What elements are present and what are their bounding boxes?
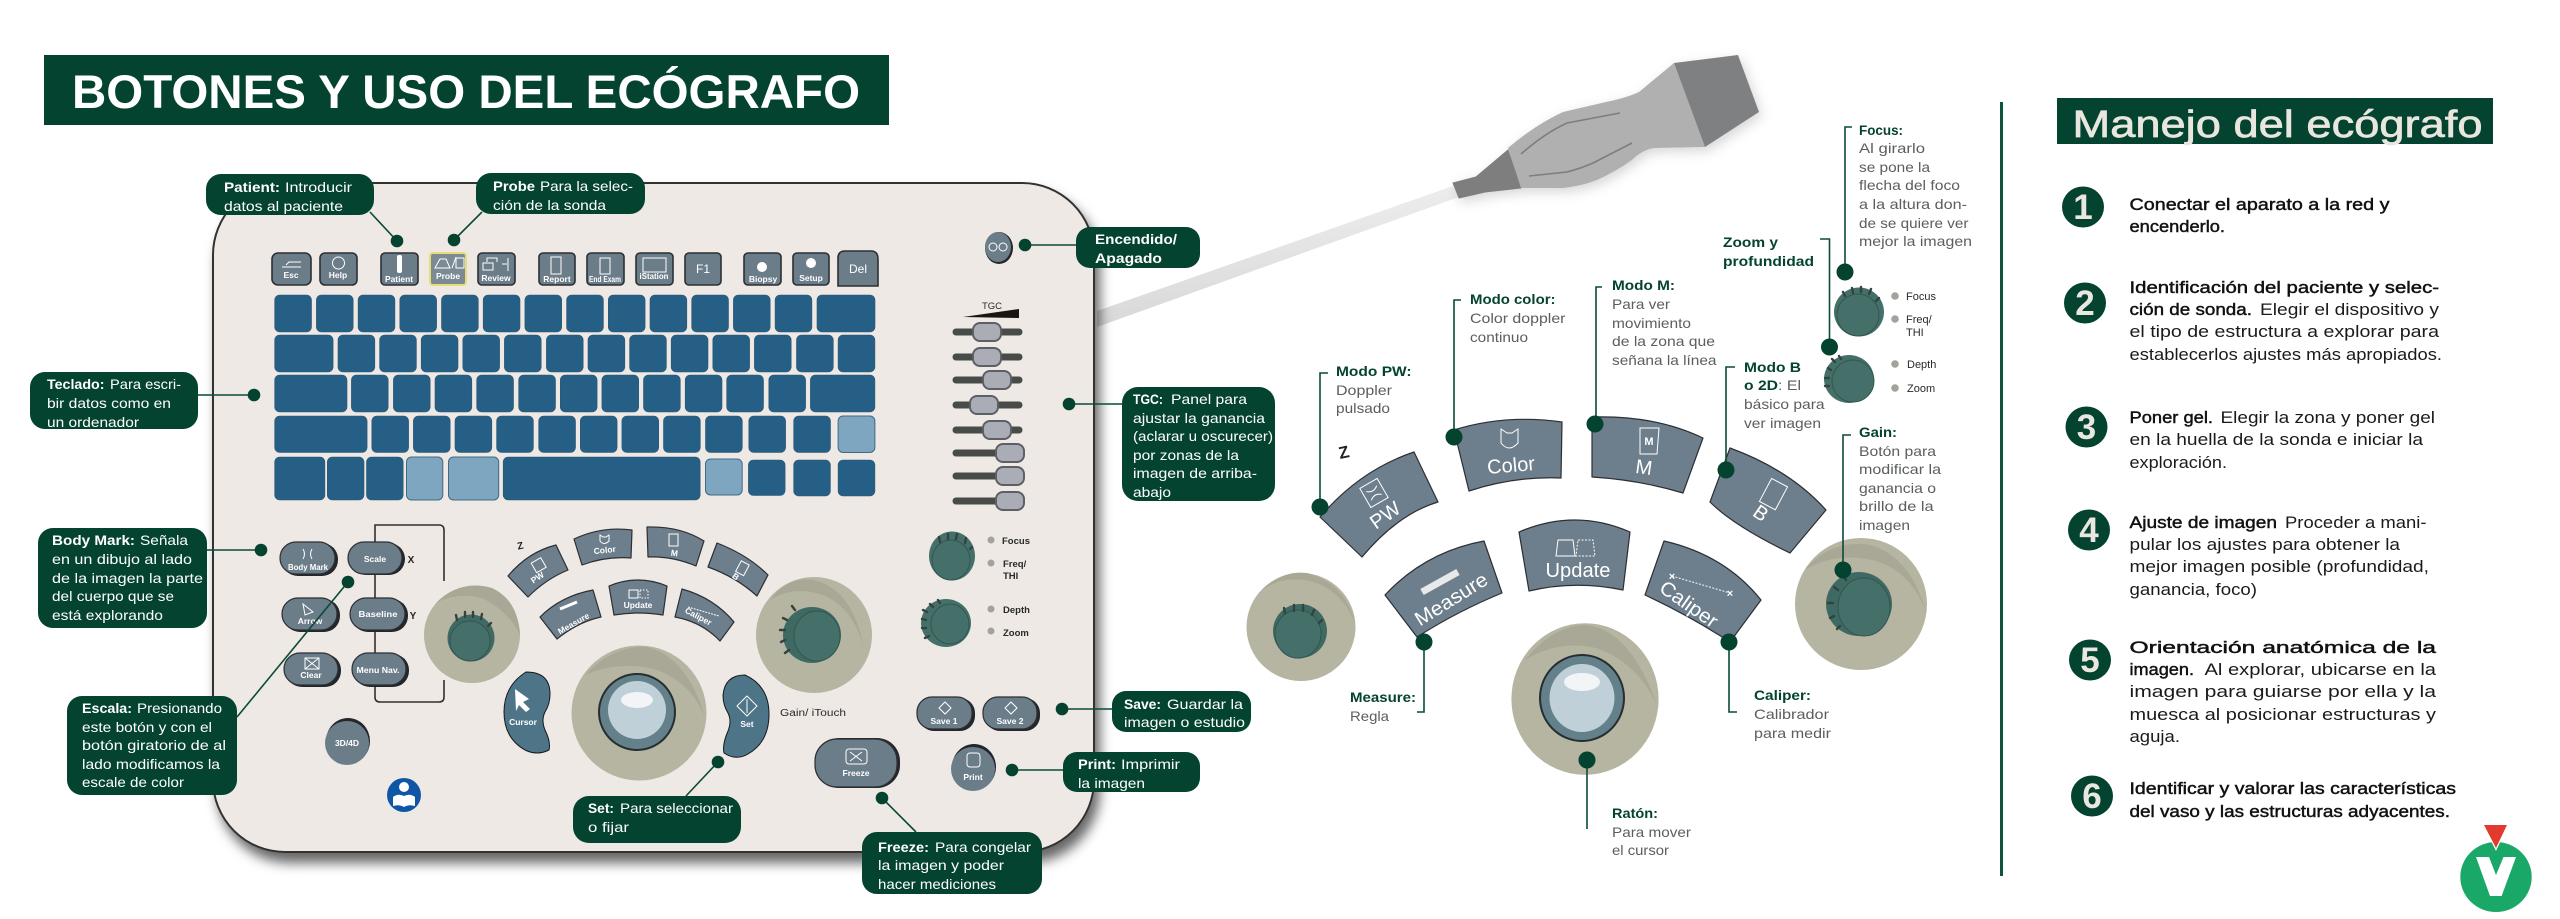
top function buttons: Help <box>329 270 347 280</box>
left keys and scale bracket: Scale <box>364 554 386 564</box>
enlarged soft keys: Update <box>1546 560 1610 582</box>
enlarged focus and depth knobs: THI <box>1906 327 1924 339</box>
cursor and set keys: Set <box>740 719 754 729</box>
soft keys small: B <box>730 571 741 582</box>
callout: Freeze: hacer mediciones <box>878 876 996 892</box>
annotation: Modo PW <box>1312 363 1412 516</box>
cursor and set keys: Cursor <box>509 717 538 727</box>
top function buttons: Probe <box>436 271 460 281</box>
annotation: Modo M <box>1586 277 1717 432</box>
callout: Encendido: Apagado <box>1095 250 1162 266</box>
step 6: 6 <box>2082 777 2102 816</box>
callout: Save: imagen o estudio <box>1124 714 1245 730</box>
left keys and scale bracket: Arrow <box>298 616 323 626</box>
annotation: Modo B: Modo B <box>1744 359 1801 375</box>
focus and depth knobs: Depth <box>1003 605 1030 616</box>
annotation: Modo B: básico para <box>1744 396 1825 412</box>
callout: Set <box>573 756 741 843</box>
annotation: Measure: Measure: <box>1350 689 1416 705</box>
annotation: Focus: flecha del foco <box>1859 177 1960 193</box>
step 1: Conectar el aparato a la red y <box>2130 196 2390 214</box>
step 5: muesca al posicionar estructuras y <box>2130 706 2437 724</box>
focus and depth knobs: Freq/ <box>1003 559 1027 570</box>
annotation: Focus: de se quiere ver <box>1859 215 1969 231</box>
callout: Freeze <box>862 792 1042 894</box>
callout: Body Mark: Señala <box>140 532 188 548</box>
annotation: Modo color: Color doppler <box>1470 310 1566 326</box>
step 3: Elegir la zona y poner gel <box>2220 409 2435 427</box>
annotation: Caliper: para medir <box>1754 725 1831 741</box>
annotation: Gain: ganancia o <box>1859 480 1936 496</box>
annotation: Modo M: señana la línea <box>1612 352 1717 368</box>
callout: Probe <box>448 173 645 246</box>
enlarged dial right <box>1795 538 1927 670</box>
callout: Patient <box>206 174 403 247</box>
focus and depth knobs: THI <box>1003 571 1018 582</box>
callout: Save <box>1056 691 1251 732</box>
callout: TGC: (aclarar u oscurecer) <box>1133 428 1273 444</box>
step 2: el tipo de estructura a explorar para <box>2130 323 2440 341</box>
callout: TGC: Panel para <box>1171 391 1247 407</box>
callout: Teclado: Teclado: <box>47 376 104 392</box>
annotation: Modo color: Modo color: <box>1470 291 1556 307</box>
enlarged soft keys: M <box>1634 456 1654 480</box>
icon: ultrasound probe <box>1097 55 1759 327</box>
enlarged focus and depth knobs: Freq/ <box>1906 314 1933 326</box>
enlarged trackball <box>1511 623 1659 775</box>
enlarged soft keys: Measure <box>1411 569 1492 631</box>
annotation: Zoom y profundidad: Zoom y <box>1723 234 1778 250</box>
callout: Escala: botón giratorio de al <box>82 737 226 753</box>
trackball <box>572 646 706 780</box>
soft keys small: PW <box>529 569 547 585</box>
callout: Print: Imprimir <box>1121 756 1180 772</box>
callout: Encendido: Encendido/ <box>1095 231 1177 247</box>
annotation: Focus: se pone la <box>1859 159 1930 175</box>
soft keys small: Color <box>593 544 617 556</box>
left keys and scale bracket: Menu Nav. <box>356 665 400 675</box>
callout: Patient: Patient: <box>224 179 280 195</box>
save freeze print keys: Save 1 <box>931 716 958 726</box>
step 1 <box>2062 186 2390 236</box>
step 5: Al explorar, ubicarse en la <box>2204 661 2437 679</box>
step 5: imagen para guiarse por ella y la <box>2130 683 2437 701</box>
annotation: Modo B: : El <box>1778 377 1801 393</box>
annotation: Gain: Gain: <box>1859 424 1897 440</box>
top function buttons: Biopsy <box>749 274 777 284</box>
annotation: Gain: brillo de la <box>1859 498 1934 514</box>
callout: Freeze: la imagen y poder <box>878 857 1004 873</box>
top function buttons: Esc <box>283 270 299 280</box>
focus and depth knobs: Focus <box>1002 536 1030 547</box>
power button <box>985 232 1013 264</box>
callout: TGC: imagen de arriba- <box>1133 465 1257 481</box>
TGC sliders <box>956 301 1024 510</box>
TGC sliders: TGC <box>982 301 1002 312</box>
annotation: Modo color: continuo <box>1470 329 1528 345</box>
enlarged soft keys: PW <box>1366 497 1405 534</box>
annotation: Modo B <box>1718 359 1825 478</box>
enlarged focus and depth knobs <box>1824 287 1936 403</box>
top function buttons: iStation <box>640 271 668 281</box>
logo <box>2460 823 2532 912</box>
step 5: imagen. <box>2130 661 2194 679</box>
callout: Escala: Presionando <box>137 700 222 716</box>
enlarged soft keys <box>1320 417 1826 642</box>
callout: Print: Print: <box>1078 756 1116 772</box>
annotation: Gain: Botón para <box>1859 443 1936 459</box>
title <box>44 55 889 125</box>
callout: Escala: este botón y con el <box>82 719 212 735</box>
save freeze print keys: Freeze <box>843 768 870 778</box>
callout: Probe: Probe <box>493 178 535 194</box>
annotation: Measure: Regla <box>1350 708 1389 724</box>
callout: TGC: abajo <box>1133 484 1171 500</box>
annotation: Focus: a la altura don- <box>1859 196 1967 212</box>
annotation: Zoom y profundidad: profundidad <box>1723 253 1814 269</box>
callout: Freeze: Para congelar <box>935 839 1031 855</box>
top function buttons: Setup <box>799 273 823 283</box>
callout: Save: Guardar la <box>1167 696 1243 712</box>
step 5: aguja. <box>2130 728 2180 746</box>
callout: Escala: Escala: <box>82 700 132 716</box>
annotation: Gain <box>1834 424 1941 578</box>
focus and depth knobs <box>921 532 1030 647</box>
annotation: Modo PW: Modo PW: <box>1336 363 1412 379</box>
step 2: 2 <box>2075 284 2095 323</box>
annotation: Modo PW: Z <box>1337 442 1351 463</box>
annotation: Ratón: Para mover <box>1612 824 1691 840</box>
annotation: Modo B: o 2D <box>1744 377 1778 393</box>
step 5: 5 <box>2080 641 2100 680</box>
enlarged focus and depth knobs: Zoom <box>1907 383 1935 395</box>
enlarged focus and depth knobs: Depth <box>1907 359 1936 371</box>
top function buttons: F1 <box>696 262 710 276</box>
annotation: Modo M: de la zona que <box>1612 333 1715 349</box>
callout: Teclado <box>30 372 260 430</box>
step 4: ganancia, foco) <box>2130 581 2257 599</box>
step 2: establecerlos ajustes más apropiados. <box>2130 346 2442 364</box>
panel: ultrasound console <box>213 183 1094 852</box>
step 3: exploración. <box>2130 454 2227 472</box>
step 3: en la huella de la sonda e iniciar la <box>2130 431 2424 449</box>
annotation: Ratón: Ratón: <box>1612 805 1658 821</box>
keyboard <box>275 295 875 500</box>
enlarged soft keys: Color <box>1486 453 1536 479</box>
annotation: Modo B: ver imagen <box>1744 415 1821 431</box>
callout: Body Mark: en un dibujo al lado <box>52 551 192 567</box>
cursor and set keys <box>504 672 769 757</box>
focus and depth knobs: Zoom <box>1003 628 1029 639</box>
panel: enlarged controls <box>1246 287 1936 775</box>
callout: Encendido <box>1019 227 1200 268</box>
step 1: encenderlo. <box>2130 218 2225 236</box>
callout: Escala: lado modificamos la <box>82 756 220 772</box>
soft keys small: Update <box>624 600 653 610</box>
left keys and scale bracket: 3D/4D <box>335 738 359 748</box>
annotation: Caliper: Caliper: <box>1754 687 1811 703</box>
enlarged soft keys: × <box>1669 571 1675 583</box>
step 1: 1 <box>2073 188 2093 227</box>
heading: Manejo del ecógrafo <box>2057 98 2493 146</box>
callout: Patient: Introducir <box>285 179 352 195</box>
annotation: Caliper: Calibrador <box>1754 706 1829 722</box>
step 5: Orientación anatómica de la <box>2130 639 2437 657</box>
annotation: Focus: mejor la imagen <box>1859 233 1972 249</box>
icon: user manual <box>387 778 421 812</box>
annotation: Ratón <box>1578 752 1691 858</box>
step 6: del vaso y las estructuras adyacentes. <box>2130 803 2450 821</box>
callout: TGC: TGC: <box>1133 391 1163 407</box>
step 6: Identificar y valorar las características <box>2130 780 2456 798</box>
callout: Set: Para seleccionar <box>620 800 733 816</box>
callout: TGC <box>1063 387 1275 501</box>
annotation: Caliper <box>1720 634 1831 741</box>
callout: Teclado: un ordenador <box>47 414 139 430</box>
callout: Probe: Para la selec- <box>540 178 633 194</box>
annotation: Gain: modificar la <box>1859 461 1941 477</box>
annotation: Modo PW: pulsado <box>1336 400 1390 416</box>
callout: Teclado: bir datos como en <box>47 395 171 411</box>
soft keys small: Z <box>516 541 525 553</box>
step 3: Poner gel. <box>2130 409 2213 427</box>
left keys and scale bracket: Baseline <box>358 609 398 619</box>
annotation: Measure <box>1350 634 1432 724</box>
top function buttons: End Exam <box>589 274 621 284</box>
step 4: 4 <box>2079 511 2099 550</box>
annotation: Focus <box>1836 122 1972 280</box>
top function buttons <box>272 251 878 286</box>
callout: Body Mark: Body Mark: <box>52 532 135 548</box>
annotation: Zoom y profundidad <box>1723 234 1838 356</box>
enlarged focus and depth knobs: Focus <box>1906 291 1936 303</box>
enlarged soft keys: B <box>1749 501 1772 527</box>
left keys and scale bracket: X <box>408 555 415 566</box>
annotation: Gain: imagen <box>1859 517 1910 533</box>
callout: Save: Save: <box>1124 696 1161 712</box>
step 2: Identificación del paciente y selec- <box>2130 279 2439 297</box>
callout: Body Mark: del cuerpo que se <box>52 588 174 604</box>
callout: Print <box>1006 752 1200 792</box>
callout: Patient: datos al paciente <box>224 198 343 214</box>
enlarged soft keys: Caliper <box>1655 577 1722 633</box>
step 2: ción de sonda. <box>2130 301 2252 319</box>
soft keys small: Caliper <box>683 605 714 628</box>
enlarged dial left <box>1246 573 1356 681</box>
callout: Print: la imagen <box>1078 775 1145 791</box>
step 4 <box>2068 510 2429 599</box>
left keys and scale bracket: Y <box>410 611 417 622</box>
callout: TGC: ajustar la ganancia <box>1133 410 1265 426</box>
enlarged soft keys: × <box>1727 588 1733 600</box>
callout: Body Mark <box>38 528 267 628</box>
callout: Teclado: Para escri- <box>110 376 181 392</box>
annotation: Modo M: Para ver <box>1612 296 1670 312</box>
step 4: Proceder a mani- <box>2285 514 2426 532</box>
callout: Body Mark: está explorando <box>52 607 163 623</box>
left keys and scale bracket: Clear <box>300 670 322 680</box>
top function buttons: Review <box>481 273 511 283</box>
step 4: pular los ajustes para obtener la <box>2130 536 2401 554</box>
soft keys small: M <box>670 548 679 558</box>
annotation: Ratón: el cursor <box>1612 842 1669 858</box>
save freeze print keys <box>815 697 1040 791</box>
callout: Freeze: Freeze: <box>878 839 929 855</box>
left keys and scale bracket: Body Mark <box>288 562 328 572</box>
callout: Set: o fijar <box>588 819 629 835</box>
title: BOTONES Y USO DEL ECÓGRAFO <box>72 65 860 118</box>
step 3: 3 <box>2077 408 2096 447</box>
step 4: mejor imagen posible (profundidad, <box>2130 558 2429 576</box>
callout: Body Mark: de la imagen la parte <box>52 570 203 586</box>
annotation: Modo PW: Doppler <box>1336 382 1392 398</box>
step 6 <box>2071 776 2456 821</box>
annotation: Modo color <box>1446 291 1566 446</box>
step 5 <box>2069 639 2437 746</box>
right dial <box>756 577 872 719</box>
left keys and scale bracket <box>280 525 444 765</box>
callout: Probe: ción de la sonda <box>493 197 606 213</box>
top function buttons: Patient <box>385 274 413 284</box>
soft keys small: Measure <box>556 610 591 636</box>
step 2: Elegir el dispositivo y <box>2260 301 2440 319</box>
soft keys small <box>508 527 768 641</box>
annotation: Modo M: movimiento <box>1612 315 1691 331</box>
left dial <box>424 586 520 683</box>
annotation: Focus: Focus: <box>1859 122 1903 138</box>
step 2 <box>2064 279 2442 364</box>
heading: Manejo del ecógrafo: Manejo del ecógrafo <box>2072 104 2482 146</box>
annotation: Focus: Al girarlo <box>1859 140 1925 156</box>
top function buttons: Del <box>849 262 867 276</box>
console body <box>213 183 1094 852</box>
step 3 <box>2066 406 2435 472</box>
callout: Set: Set: <box>588 800 614 816</box>
save freeze print keys: Save 2 <box>997 716 1024 726</box>
top function buttons: Report <box>543 274 571 284</box>
callout: Escala: escale de color <box>82 774 184 790</box>
step 4: Ajuste de imagen <box>2130 514 2277 532</box>
save freeze print keys: Print <box>963 772 983 782</box>
callout: TGC: por zonas de la <box>1133 447 1239 463</box>
enlarged soft keys: M <box>1644 436 1654 448</box>
callout: Escala <box>67 576 354 795</box>
annotation: Modo M: Modo M: <box>1612 277 1675 293</box>
right dial: Gain/ iTouch <box>780 708 846 719</box>
